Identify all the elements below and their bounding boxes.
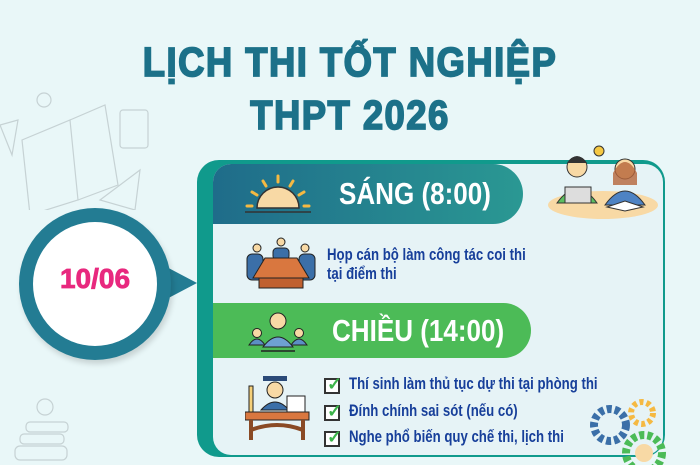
- morning task: tại điểm thi: [327, 265, 397, 283]
- afternoon checklist: Thí sinh làm thủ tục dự thi tại phòng thi: [349, 375, 598, 393]
- morning task: Họp cán bộ làm công tác coi thi: [327, 246, 526, 264]
- illustration: students studying: [548, 146, 658, 219]
- icon: group: [248, 312, 308, 352]
- decorative doodles left: [0, 92, 148, 210]
- pointer arrow: [169, 268, 197, 298]
- afternoon checklist: ✓: [327, 427, 342, 447]
- icon: graduate at desk: [245, 376, 310, 440]
- morning heading: SÁNG (8:00): [339, 176, 491, 211]
- afternoon checklist: Nghe phổ biến quy chế thi, lịch thi: [349, 428, 564, 446]
- morning header: [213, 164, 523, 224]
- icon: sunrise: [245, 174, 311, 213]
- afternoon checklist: [324, 374, 598, 447]
- date text: 10/06: [60, 263, 130, 294]
- afternoon checklist: ✓: [327, 400, 342, 420]
- afternoon heading: CHIỀU (14:00): [332, 313, 504, 348]
- schedule card: [197, 160, 665, 457]
- afternoon checklist: ✓: [327, 374, 342, 394]
- afternoon header: [213, 303, 531, 358]
- title: LỊCH THI TỐT NGHIỆP: [143, 40, 557, 86]
- date badge: [19, 208, 197, 366]
- icon: meeting table: [246, 238, 316, 288]
- icon: gears: [590, 399, 666, 465]
- subtitle: THPT 2026: [250, 93, 450, 139]
- afternoon checklist: Đính chính sai sót (nếu có): [349, 402, 518, 420]
- books doodle: [14, 398, 68, 461]
- morning task: [327, 246, 526, 283]
